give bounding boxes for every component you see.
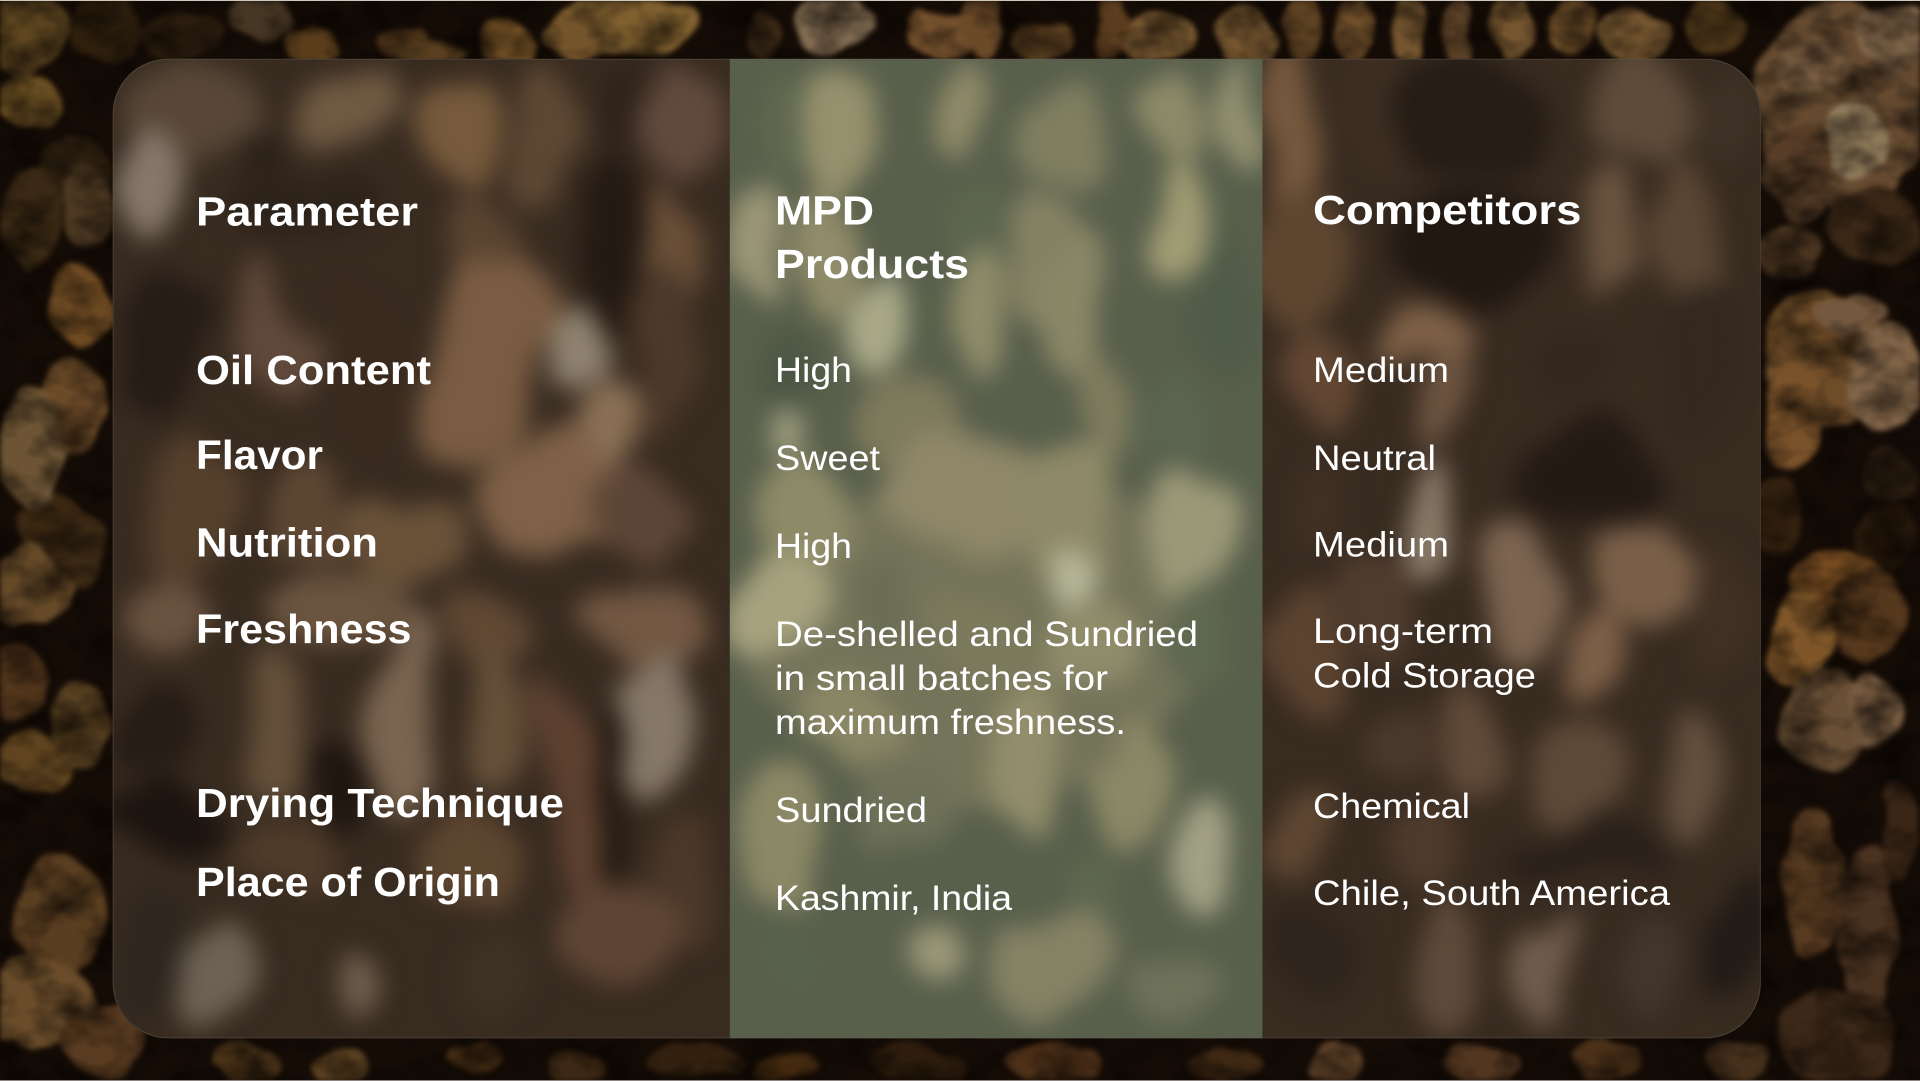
value: oil content: Medium — [1313, 351, 1449, 390]
column: Parameter — [196, 188, 564, 905]
value: freshness — [775, 615, 1198, 742]
heading: MPD Products: MPD — [775, 188, 874, 234]
column: Competitors — [1313, 187, 1671, 913]
value: drying technique: Sundried — [775, 791, 927, 830]
value: freshness: in small batches for — [775, 659, 1108, 698]
value: freshness: De-shelled and Sundried — [775, 615, 1198, 654]
row label: Flavor: Flavor — [196, 432, 323, 478]
row label: Place of Origin: Place of Origin — [196, 859, 500, 905]
value: freshness: maximum freshness. — [775, 703, 1126, 742]
heading: MPD Products — [775, 188, 969, 287]
panel section: left and right brown glass — [104, 49, 1766, 1038]
value: freshness — [1313, 612, 1536, 696]
heading: Parameter: Parameter — [196, 188, 418, 234]
value: nutrition: Medium — [1313, 526, 1449, 564]
value: place of origin: Chile, South America — [1313, 874, 1671, 913]
value: oil content: High — [775, 351, 852, 390]
panel section: green highlighted column — [730, 59, 1262, 1038]
row label: Oil Content: Oil Content — [196, 347, 431, 393]
panel: blurred glass table background — [104, 49, 1766, 1038]
row label: Nutrition: Nutrition — [196, 520, 378, 566]
value: drying technique: Chemical — [1313, 787, 1470, 826]
value: flavor: Sweet — [775, 439, 880, 478]
heading: Competitors: Competitors — [1313, 187, 1582, 233]
value: nutrition: High — [775, 527, 852, 566]
value: place of origin: Kashmir, India — [775, 879, 1013, 918]
row label: Freshness: Freshness — [196, 606, 412, 652]
value: freshness: Long-term — [1313, 612, 1493, 651]
heading: MPD Products: Products — [775, 241, 969, 287]
value: freshness: Cold Storage — [1313, 656, 1536, 696]
value: flavor: Neutral — [1313, 439, 1436, 478]
column: MPD Products — [775, 188, 1198, 918]
row label: Drying Technique: Drying Technique — [196, 780, 564, 826]
